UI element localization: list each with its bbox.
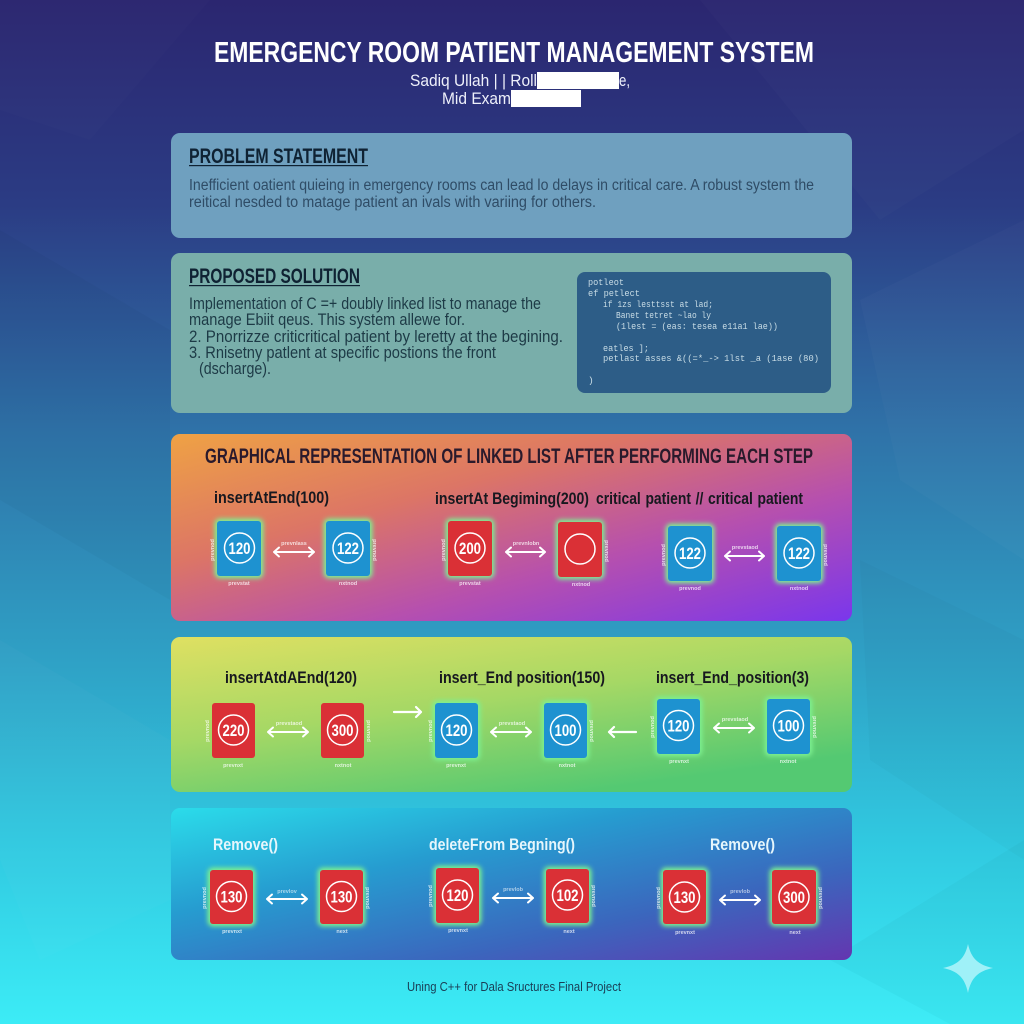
arrow: 120 to 102: prevlob	[503, 887, 524, 893]
node: 300: 300	[332, 722, 354, 740]
node: 200: prevnod	[441, 539, 447, 561]
arrow: 200 to empty: prevnlobn	[513, 541, 540, 547]
arrow: 130 to 300: prevlob	[730, 889, 751, 895]
node: 300 remove	[771, 869, 823, 936]
icon: sparkle star	[943, 944, 993, 993]
node: 122 critical: 122	[679, 545, 701, 563]
node: 122 second: prevnod	[822, 544, 828, 566]
subtitle: Mid Exam	[442, 90, 511, 108]
node: 100 position: nxtnot	[780, 759, 797, 765]
node: 120: 120	[228, 540, 250, 558]
node: 300 remove: 300	[783, 889, 805, 907]
proposed solution text: 3. Rnisetny patlent at specific postions the front	[189, 344, 496, 362]
step label: insertAtdAEnd: insertAtdAEnd(120)	[225, 668, 357, 687]
node: 300: nxtnot	[335, 763, 352, 769]
node: 130	[202, 869, 254, 935]
subtitle	[410, 72, 630, 108]
proposed solution text: manage Ebiit qeus. This system allewe for.	[189, 311, 465, 329]
node: 130 third: 130	[674, 889, 696, 907]
arrow: 122 to 122	[725, 545, 764, 560]
step label: insert_End_position: insert_End_position(3)	[656, 668, 809, 687]
subtitle: Sadiq Ullah | | Roll	[410, 72, 537, 90]
arrow: 122 to 122: prevstaod	[732, 545, 758, 551]
node: 220	[205, 703, 255, 769]
node: 120 inserted: prevnod	[428, 720, 434, 742]
node: 120 delete	[428, 867, 480, 934]
node: 122 critical: prevnod	[679, 586, 701, 592]
node: 122	[325, 520, 377, 587]
code block: potleot	[588, 277, 624, 288]
node: 102	[545, 868, 596, 935]
node: 120 position: prevnxt	[669, 759, 689, 765]
code block: if 1zs lesttsst at lad;	[603, 299, 713, 310]
problem statement text	[189, 177, 814, 211]
node: 120 delete: 120	[446, 887, 468, 905]
node: 122 second: 122	[788, 545, 810, 563]
node: 100 position: 100	[778, 718, 800, 736]
arrow: 120 to 100 position	[714, 717, 754, 732]
panel: insert operations	[171, 637, 852, 792]
node: 130 second: 130	[330, 888, 352, 906]
code block: (1lest = (eas: tesea e11a1 lae))	[616, 321, 778, 332]
code block: eatles ];	[603, 343, 649, 354]
arrow: 120 to 122: prevnlass	[281, 541, 307, 547]
node: 220: prevnxt	[223, 763, 243, 769]
node: 130: prevnod	[202, 887, 208, 909]
node: 100 position	[766, 698, 817, 765]
node: 130 third: prevnod	[656, 887, 662, 909]
proposed solution text: 2. Pnorrizze criticritical patient by leretty at the begining.	[189, 328, 563, 346]
step label: remove: Remove()	[213, 835, 278, 854]
problem statement text: reitical nesded to matage patient an ivals with variing for others.	[189, 194, 596, 211]
node: 220: 220	[222, 722, 244, 740]
node: 300 remove: prevnod	[817, 887, 823, 909]
node: 102: 102	[556, 887, 578, 905]
node: 130 second	[319, 869, 370, 935]
node: 200: prevstat	[459, 581, 481, 587]
problem statement text: Inefficient oatient quieing in emergency rooms can lead lo delays in critical care. A robust system the	[189, 177, 814, 194]
node: 100: nxtnot	[559, 763, 576, 769]
node: 120 delete: prevnxt	[448, 928, 468, 934]
arrow: to insert position	[394, 707, 421, 717]
panel: problem statement	[171, 133, 852, 238]
node: 120 inserted: prevnxt	[446, 763, 466, 769]
node: 130 third: prevnxt	[675, 930, 695, 936]
node: 120: prevnod	[210, 539, 216, 561]
step label: critical patient: critical patient // critical patient	[596, 489, 803, 508]
node: 120	[210, 520, 262, 587]
node: 130 second: next	[336, 929, 348, 935]
node: 122 critical: prevnod	[661, 544, 667, 566]
node: 100 position: prevnod	[811, 716, 817, 738]
arrow: 220 to 300	[268, 721, 308, 736]
code block: ef petlect	[588, 288, 640, 299]
step label: insertAt Begiming: insertAt Begiming(200)	[435, 489, 589, 508]
arrow: 120 to 100	[491, 721, 531, 736]
code block: petlast asses &((=*_-> 1lst _a (1ase (80)	[603, 353, 819, 364]
heading: proposed solution: PROPOSED SOLUTION	[189, 265, 360, 288]
node: 200	[441, 520, 493, 587]
panel: graphical representation	[171, 434, 852, 621]
node: 200: 200	[459, 540, 481, 558]
node: 300	[321, 703, 371, 769]
node: 102: next	[563, 929, 575, 935]
heading: problem statement: PROBLEM STATEMENT	[189, 145, 368, 168]
proposed solution text: (dscharge).	[199, 360, 271, 378]
proposed solution text: Implementation of C =+ doubly linked list to manage the	[189, 295, 541, 313]
arrow: 130 to 300	[720, 889, 760, 904]
node: 130: 130	[220, 888, 242, 906]
arrow: 130 to 130: prevlov	[277, 889, 298, 895]
node: 120 inserted: 120	[446, 722, 468, 740]
step label: insert_End position: insert_End position(150)	[439, 668, 605, 687]
node: 122 second	[776, 525, 828, 592]
node: 120 position	[650, 698, 701, 765]
heading: graphical representation: GRAPHICAL REPRESENTATION OF LINKED LIST AFTER PERFORMING EACH STEP	[205, 445, 813, 468]
subtitle: e,	[619, 72, 630, 90]
panel: proposed solution	[171, 253, 852, 413]
node: 120 position: 120	[668, 718, 690, 736]
footer: Uning C++ for Dala Sructures Final Project	[407, 979, 621, 994]
node: 120 delete: prevnod	[428, 885, 434, 907]
step label: remove second: Remove()	[710, 835, 775, 854]
node: 122 critical	[661, 525, 713, 592]
arrow: 130 to 130	[267, 889, 307, 904]
arrow: from position	[609, 727, 636, 737]
node: 130 second: prevnod	[364, 887, 370, 909]
node: 122 second: nxtnod	[790, 586, 808, 592]
node: 122: prevnod	[371, 539, 377, 561]
arrow: 120 to 122	[274, 541, 314, 556]
node: 300 remove: next	[789, 930, 801, 936]
node: empty: nxtnod	[572, 582, 590, 588]
title: EMERGENCY ROOM PATIENT MANAGEMENT SYSTEM	[214, 37, 814, 69]
node: 120 position: prevnod	[650, 716, 656, 738]
panel: remove operations	[171, 808, 852, 960]
code block: )	[588, 375, 594, 386]
node: 130: prevnxt	[222, 929, 242, 935]
node: 122: nxtnod	[339, 581, 357, 587]
node: 120 inserted	[428, 702, 479, 769]
step label: deleteFrom Begining: deleteFrom Begning()	[429, 835, 575, 854]
node: 122: 122	[337, 540, 359, 558]
node: 220: prevnod	[205, 720, 211, 742]
node: 100: 100	[554, 722, 576, 740]
step label: insertAtEnd: insertAtEnd(100)	[214, 488, 329, 507]
node: empty: prevnod	[603, 540, 609, 562]
node: 120: prevstat	[228, 581, 250, 587]
node: 300: prevnod	[365, 720, 371, 742]
code block: Banet tetret ~lao ly	[616, 310, 711, 321]
node: 130 third	[656, 869, 707, 936]
node: 100: prevnod	[588, 720, 594, 742]
node: 100	[543, 702, 594, 769]
arrow: 120 to 100: prevstaod	[499, 721, 525, 727]
arrow: 200 to empty	[506, 541, 545, 556]
arrow: 120 to 102	[493, 887, 533, 902]
node: empty	[557, 521, 609, 588]
code block	[577, 272, 831, 393]
proposed solution text	[189, 295, 563, 378]
node: 102: prevnod	[590, 885, 596, 907]
arrow: 220 to 300: prevstaod	[276, 721, 302, 727]
arrow: 120 to 100 position: prevstaod	[722, 717, 748, 723]
